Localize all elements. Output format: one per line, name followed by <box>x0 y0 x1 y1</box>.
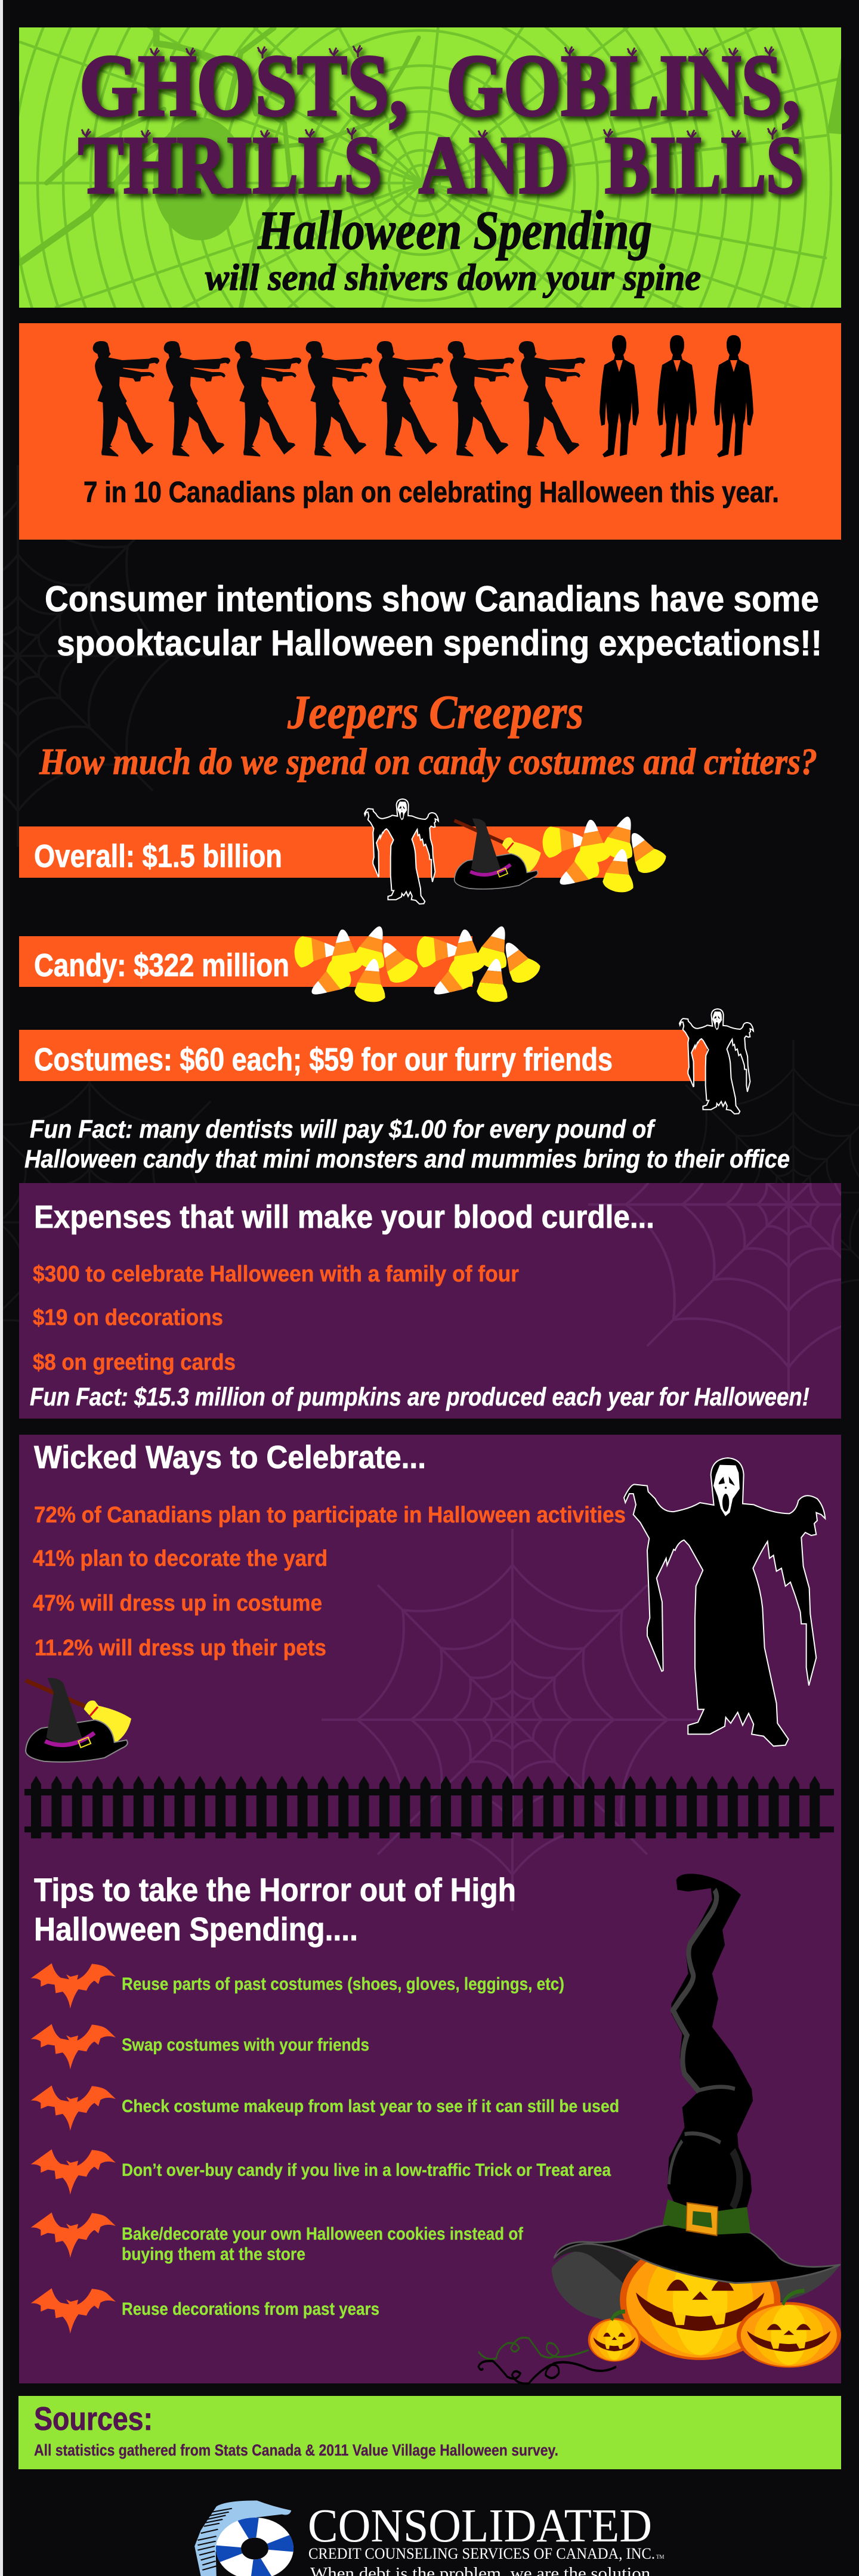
icon: men in suits <box>600 335 753 457</box>
icon: witch hat <box>455 819 541 889</box>
sources heading: Sources: <box>34 2400 153 2437</box>
fun fact: dentists <box>24 1115 790 1174</box>
panel: expenses <box>19 1183 841 1419</box>
expense list: $8 on greeting cards <box>33 1350 236 1375</box>
statistics list <box>33 1503 626 1661</box>
expense list: $19 on decorations <box>33 1305 223 1330</box>
illustration: witch hat and pumpkins <box>478 1874 841 2383</box>
tips list: Check costume makeup from last year to see if it can still be used <box>122 2097 619 2116</box>
bar: costumes <box>19 1009 753 1114</box>
heading: Jeepers Creepers <box>39 686 817 782</box>
heading: tips: Halloween Spending.... <box>34 1911 358 1948</box>
subtitle: will send shivers down your spine <box>205 258 701 298</box>
icons: bats <box>31 1963 116 2333</box>
icon: ghost <box>364 799 438 904</box>
heading: Jeepers Creepers: Jeepers Creepers <box>287 686 583 739</box>
tips list: Swap costumes with your friends <box>122 2035 369 2055</box>
icon: ghost <box>679 1009 753 1114</box>
spider web and spider <box>19 27 841 308</box>
title: BILLS <box>605 119 804 210</box>
panel: 7 in 10 <box>19 323 841 540</box>
statistics list: 11.2% will dress up their pets <box>35 1636 326 1661</box>
icon: candy corn <box>541 812 669 897</box>
heading: tips: Tips to take the Horror out of High <box>34 1871 516 1908</box>
expense list: $300 to celebrate Halloween with a family of four <box>33 1262 519 1287</box>
icon: zombies <box>93 341 585 457</box>
heading: Wicked Ways to Celebrate... <box>34 1439 426 1475</box>
tips list <box>122 1974 619 2319</box>
background web <box>322 1529 703 1911</box>
fence <box>24 1776 834 1838</box>
wordmark: CONSOLIDATED <box>308 2500 652 2552</box>
intro heading <box>45 579 822 663</box>
sources text: All statistics gathered from Stats Canada & 2011 Value Village Halloween survey. <box>34 2441 558 2459</box>
tips list: Don’t over-buy candy if you live in a low-traffic Trick or Treat area <box>122 2160 611 2180</box>
icon: large ghost <box>624 1458 825 1746</box>
icon: candy corn <box>293 922 421 1007</box>
icon: witch hat <box>26 1678 131 1762</box>
title <box>78 37 804 210</box>
bar: overall <box>19 799 669 904</box>
heading: tips <box>34 1871 516 1948</box>
title: GHOSTS, <box>79 37 408 135</box>
panel: sources <box>18 2396 841 2469</box>
bar label: Candy: $322 million <box>34 948 289 983</box>
statistics list: 72% of Canadians plan to participate in Halloween activities <box>34 1503 626 1528</box>
bar label: Overall: $1.5 billion <box>34 838 282 874</box>
title: GOBLINS, <box>446 37 801 135</box>
panel: header <box>19 27 841 308</box>
left page edge <box>0 0 3 2576</box>
background webs: dark sections <box>0 465 859 1394</box>
tips list: Bake/decorate your own Halloween cookies instead of <box>122 2224 524 2244</box>
icon: candy corn <box>415 922 543 1007</box>
logo: Consolidated Credit <box>194 2500 664 2576</box>
title: AND <box>419 119 569 210</box>
expense list <box>33 1262 519 1375</box>
statistics list: 47% will dress up in costume <box>33 1591 322 1616</box>
statistics list: 41% plan to decorate the yard <box>33 1546 327 1571</box>
bar: candy <box>19 922 543 1007</box>
panel: wicked ways and tips <box>19 1435 841 2383</box>
subtitle: Halloween Spending <box>257 200 652 261</box>
bar label: Costumes: $60 each; $59 for our furry friends <box>34 1042 613 1078</box>
subtitle <box>205 200 701 298</box>
title: THRILLS <box>78 119 382 210</box>
icon: life ring <box>194 2500 291 2576</box>
company name: CREDIT COUNSELING SERVICES OF CANADA, INC. <box>308 2545 655 2562</box>
trademark: TM <box>656 2554 665 2560</box>
tips list: Reuse parts of past costumes (shoes, gloves, leggings, etc) <box>122 1974 564 1994</box>
tips list: buying them at the store <box>122 2244 305 2264</box>
tips list: Reuse decorations from past years <box>122 2299 379 2319</box>
heading: Expenses that will make your blood curdle... <box>34 1199 654 1235</box>
fun fact: dentists: Fun Fact: many dentists will pay $1.00 for every pound of <box>30 1115 656 1144</box>
background web <box>588 1183 841 1405</box>
